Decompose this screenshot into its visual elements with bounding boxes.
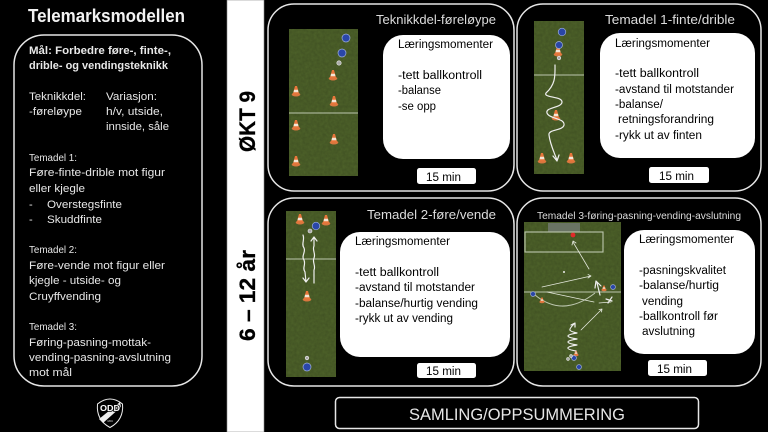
learning points box <box>340 232 510 357</box>
heading: Teknikkdel-føreløype <box>376 13 496 27</box>
learning points box: -balanse/hurtig <box>639 280 719 292</box>
theme 2 text: Temadel 2: <box>29 244 77 256</box>
learning points box: -tett ballkontroll <box>615 68 699 80</box>
arrows: passes and runs <box>542 241 612 351</box>
icon: club logo shield <box>97 399 123 428</box>
heading: Temadel 1-finte/drible <box>605 13 735 27</box>
heading: Temadel 3-føring-pasning-vending-avslutning <box>537 211 741 222</box>
learning points box: retningsforandring <box>618 114 714 126</box>
learning points box: Læringsmomenter <box>398 39 493 51</box>
duration <box>648 360 707 376</box>
vertical label: age: 6 – 12 år <box>235 250 260 341</box>
pitch diagram <box>286 211 336 377</box>
theme 1 text: Overstegsfinte <box>47 199 122 211</box>
title: Telemarksmodellen <box>28 6 185 26</box>
theme 1 text: Føre-finte-drible mot figur <box>29 167 165 179</box>
vertical label: session: ØKT 9 <box>235 91 260 152</box>
learning points box: -balanse/hurtig vending <box>355 298 478 310</box>
theme 1 text: eller kjegle <box>29 183 85 195</box>
goal text: drible- og vendingsteknikk <box>29 60 169 72</box>
goal text: Mål: Forbedre føre-, finte-, <box>29 45 171 57</box>
technique part text: Variasjon: <box>106 91 157 103</box>
theme 2 text: Cruyffvending <box>29 291 101 303</box>
theme 3 text: Temadel 3: <box>29 321 77 333</box>
duration: 15 min <box>426 172 461 184</box>
panel: model description <box>14 35 202 386</box>
technique part text: Teknikkdel: <box>29 91 86 103</box>
learning points box <box>383 35 510 159</box>
theme 3 text: vending-pasning-avslutning <box>29 352 171 364</box>
pitch diagram <box>289 29 358 176</box>
theme 1 text <box>29 152 165 226</box>
bottom banner: summary: SAMLING/OPPSUMMERING <box>409 406 625 424</box>
theme 2 text <box>29 244 165 303</box>
learning points box: -rykk ut av vending <box>355 313 453 325</box>
theme 3 text: Føring-pasning-mottak- <box>29 337 151 349</box>
panel: theme 3 <box>517 198 761 386</box>
duration <box>417 363 476 378</box>
duration <box>417 168 476 184</box>
technique part text: h/v, utside, <box>106 106 163 118</box>
learning points box: -se opp <box>398 101 436 113</box>
learning points box <box>624 230 755 354</box>
technique part text <box>29 91 169 133</box>
theme 3 text <box>29 321 171 379</box>
theme 3 text: mot mål <box>29 367 72 379</box>
theme 1 text: - <box>29 214 33 226</box>
heading: Temadel 2-føre/vende <box>367 208 496 222</box>
technique part text: innside, såle <box>106 121 169 133</box>
technique part text: -føreløype <box>29 106 82 118</box>
theme 2 text: Føre-vende mot figur eller <box>29 260 165 272</box>
arrow: up dribble <box>311 237 317 283</box>
learning points box: vending <box>642 296 683 308</box>
panel: technique part <box>268 4 514 191</box>
learning points box: Læringsmomenter <box>639 234 734 246</box>
theme 2 text: kjegle - utside- og <box>29 275 121 287</box>
pitch diagram <box>524 222 621 371</box>
learning points box: -balanse/ <box>615 99 664 111</box>
theme 1 text: - <box>29 199 33 211</box>
theme 1 text: Temadel 1: <box>29 152 77 164</box>
learning points box <box>600 33 755 158</box>
duration: 15 min <box>657 364 692 376</box>
learning points box: -tett ballkontroll <box>355 267 439 279</box>
learning points box: -avstand til motstander <box>355 282 475 294</box>
duration: 15 min <box>426 366 461 378</box>
duration: 15 min <box>659 171 694 183</box>
bottom banner: summary <box>336 398 698 428</box>
white centre strip <box>227 0 264 432</box>
arrow: dribble path <box>546 65 564 161</box>
goal text <box>29 45 171 72</box>
learning points box: -ballkontroll før <box>639 311 718 323</box>
theme 1 text: Skuddfinte <box>47 214 102 226</box>
learning points box: -rykk ut av finten <box>615 130 702 142</box>
learning points box: -balanse <box>398 85 441 97</box>
learning points box: -pasningskvalitet <box>639 265 727 277</box>
learning points box: -tett ballkontroll <box>398 70 482 82</box>
learning points box: Læringsmomenter <box>615 38 710 50</box>
learning points box: avslutning <box>642 326 695 338</box>
learning points box: -avstand til motstander <box>615 84 734 96</box>
arrow: down dribble <box>303 235 309 282</box>
icon: club logo shield: ODD <box>100 404 120 413</box>
panel: theme 2 <box>268 198 514 386</box>
pitch diagram <box>534 21 584 174</box>
icon: club logo shield: 1894 <box>107 420 113 423</box>
duration <box>649 167 709 183</box>
panel: theme 1 <box>517 4 761 191</box>
learning points box: Læringsmomenter <box>355 236 450 248</box>
